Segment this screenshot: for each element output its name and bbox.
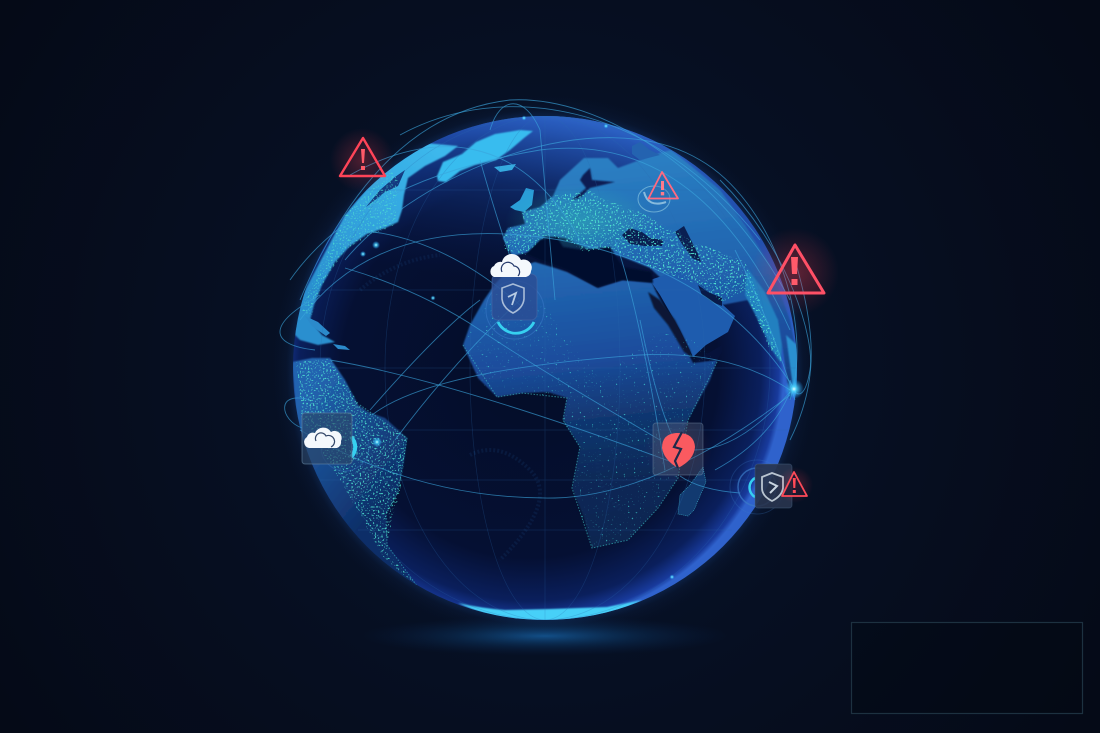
tile [755, 464, 792, 508]
landmass: India [745, 268, 782, 363]
swirl ring [638, 186, 670, 212]
ring [321, 423, 369, 471]
sea: Caspian [675, 226, 701, 262]
landmass: North America [290, 143, 458, 345]
tile [492, 274, 537, 320]
globe halo glow [270, 93, 820, 643]
upper atmosphere shading [293, 116, 797, 620]
sea: White Sea [632, 142, 660, 160]
landmass: Eurasia [503, 150, 800, 400]
landmass: Arabian peninsula [650, 270, 735, 357]
landmass: Iceland [494, 164, 516, 172]
network node glows [360, 116, 804, 580]
sea: Gulf of Aden [697, 360, 716, 361]
continents [280, 110, 810, 630]
tile [302, 413, 352, 464]
service tile: cloud over south america [302, 413, 369, 471]
tile [653, 423, 703, 475]
landmass: Madagascar [678, 467, 706, 516]
ring [486, 281, 544, 339]
alert icon: russia warning triangle [638, 172, 678, 212]
latitude and longitude graticule [292, 116, 798, 620]
landmass: Greenland [437, 130, 533, 182]
service tile: shield and warning at limb [730, 460, 813, 514]
ocean sphere [293, 116, 797, 620]
landmass: Southeast Asia limb [786, 335, 797, 394]
landmass: South America [292, 358, 420, 590]
service tile: shield with cloud over north africa [486, 254, 544, 339]
globe [280, 110, 810, 630]
warning [777, 467, 813, 503]
dotted coastlines [360, 345, 717, 590]
landmass: UK [510, 188, 534, 212]
sea: Mediterranean [526, 237, 653, 287]
infographic canvas [226, 48, 1083, 714]
floor reflection glow [360, 616, 730, 656]
ring [730, 460, 784, 514]
shield [502, 284, 524, 313]
sea: Red Sea [648, 292, 692, 357]
alert icon: large india warning triangle [751, 228, 839, 316]
teal glow of European lights [514, 192, 638, 250]
sea: Persian Gulf [698, 285, 722, 306]
landmass: Caribbean islands [310, 318, 350, 350]
city lights [280, 110, 810, 630]
landmass: Africa and Arabia [463, 262, 717, 548]
sea: Hudson Bay [366, 170, 405, 207]
network arcs [280, 100, 811, 498]
sea: Baltic [572, 168, 615, 200]
sea: Black Sea [622, 228, 663, 246]
broken heart [662, 433, 695, 468]
Antarctic ice rim [458, 600, 642, 622]
cloud [304, 428, 342, 448]
shield [762, 473, 783, 501]
service tile: broken heart over east africa [644, 416, 712, 484]
empty legend frame [852, 622, 1082, 714]
faint ocean-floor traces [359, 254, 542, 560]
cloud [490, 254, 532, 277]
alert icon: north atlantic warning triangle [330, 128, 394, 192]
